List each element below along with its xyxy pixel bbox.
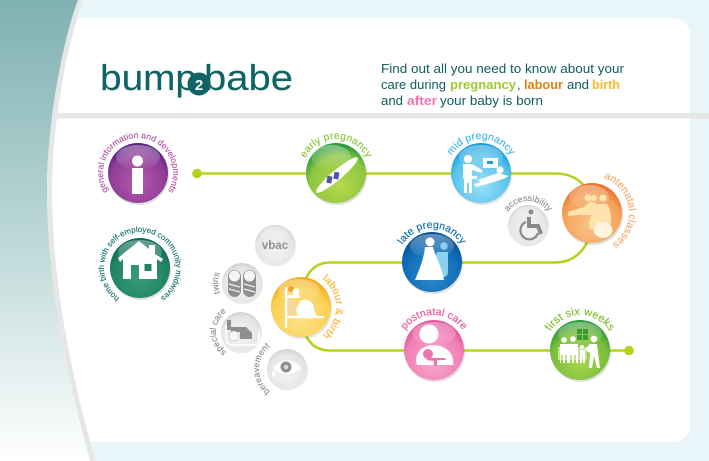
intro text: and — [381, 93, 403, 108]
label: special care — [210, 309, 226, 356]
button: vbac — [255, 225, 296, 266]
pathway line — [192, 169, 634, 355]
intro text — [381, 61, 625, 108]
button: first six weeks — [544, 308, 614, 382]
button: antenatal classes — [562, 173, 636, 248]
icon: wheelchair — [520, 210, 541, 239]
icon: breastfeeding mother — [416, 324, 453, 366]
intro text: birth — [592, 77, 620, 92]
icon: info — [132, 156, 143, 194]
button: home birth — [98, 226, 181, 302]
label: mid pregnancy — [448, 133, 515, 155]
button: special care — [210, 309, 262, 356]
button: twins — [212, 263, 263, 304]
label: late pregnancy — [396, 222, 466, 244]
logo text second part: babe — [204, 57, 293, 98]
label: postnatal care — [401, 308, 466, 331]
label: early pregnancy — [301, 133, 372, 158]
button: labour and birth — [271, 274, 343, 339]
start dot — [192, 169, 202, 178]
logo numeral: 2 — [195, 77, 203, 94]
icon: family with midwife — [558, 329, 600, 368]
button: mid pregnancy — [448, 133, 515, 205]
icon: incubator — [226, 320, 259, 345]
intro text: care during — [381, 77, 446, 92]
icon: ultrasound scan — [463, 155, 509, 193]
button: general information — [98, 133, 178, 205]
intro text: , — [517, 77, 521, 92]
button: bereavement — [254, 342, 308, 396]
label: general information and developments — [98, 133, 178, 193]
label: twins — [212, 272, 220, 294]
label: antenatal classes — [604, 173, 636, 248]
logo — [100, 57, 293, 98]
label: first six weeks — [544, 308, 614, 331]
label: vbac — [262, 240, 289, 252]
icon: pregnancy test — [313, 154, 361, 196]
button: accessibility — [505, 195, 552, 246]
left grey curved stroke — [50, 0, 93, 461]
icon: twins — [228, 270, 256, 297]
label: accessibility — [505, 195, 552, 212]
left teal curved band — [0, 0, 90, 461]
button: early pregnancy — [301, 133, 372, 205]
button: late pregnancy — [396, 222, 466, 294]
icon: class group — [568, 194, 612, 238]
header divider — [56, 113, 709, 118]
label: home birth with self-employed community midwives — [98, 226, 181, 302]
intro text: your baby is born — [440, 93, 543, 108]
icon: eye with tear — [272, 360, 301, 377]
logo circle with 2 — [188, 72, 210, 96]
logo text: bump — [100, 57, 197, 98]
label: labour & birth — [322, 274, 343, 338]
intro text: labour — [524, 77, 563, 92]
end dot — [624, 346, 634, 355]
icon: labour — [281, 286, 324, 328]
button: postnatal care — [401, 308, 466, 382]
icon: mother and midwife — [415, 238, 448, 280]
intro text: and — [567, 77, 589, 92]
intro text: after — [407, 93, 437, 108]
label: bereavement — [254, 342, 270, 396]
icon: house — [118, 241, 163, 279]
intro text: pregnancy — [450, 77, 517, 92]
intro text: Find out all you need to know about your — [381, 61, 625, 76]
